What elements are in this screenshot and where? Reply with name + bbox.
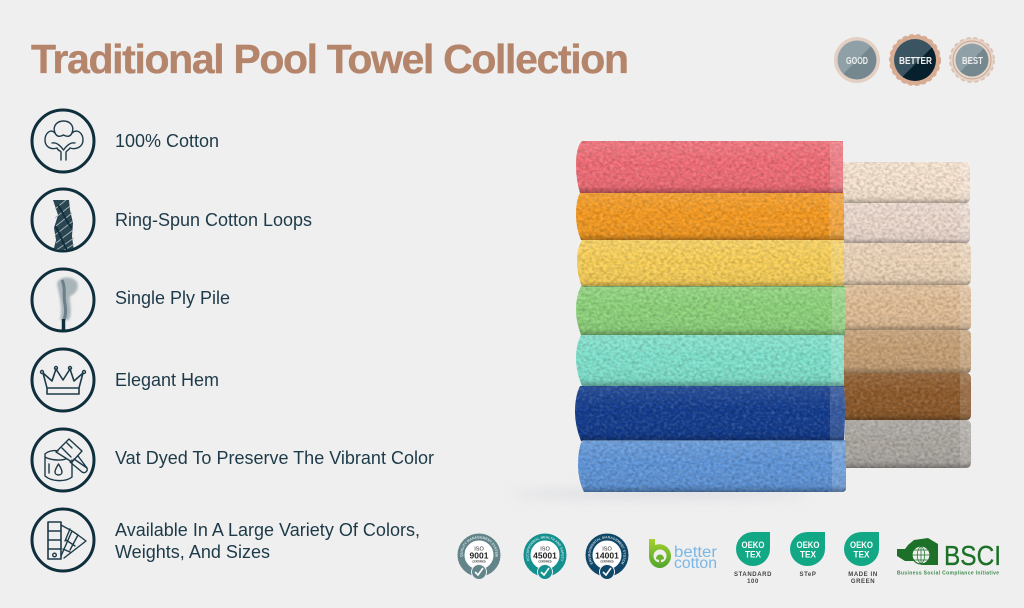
badge: OEKO-TEX Made in Green: GREEN: [851, 579, 875, 585]
badge: ISO 45001: ISO: [540, 546, 550, 552]
badge: best: [950, 38, 994, 82]
badge: ISO 9001: 9001: [470, 550, 489, 560]
label: 100% Cotton: [115, 131, 219, 151]
badge: good: GOOD: [846, 55, 868, 67]
icon: colour fan deck: [32, 509, 94, 571]
badge: ISO 45001: CERTIFIED: [538, 560, 552, 564]
badge: ISO 14001: [586, 534, 628, 579]
badge: OEKO-TEX Made in Green: TEX: [854, 550, 870, 560]
badge: ISO 45001: 45001: [533, 550, 557, 560]
badge: ISO 45001: [524, 534, 566, 579]
badge: ISO 9001: ISO: [474, 546, 484, 552]
badge: OEKO-TEX Standard 100: OEKO: [742, 540, 764, 550]
badge: better: [890, 35, 940, 85]
back towel stack: neutrals: [843, 162, 971, 468]
logo: BSCI: BSCI: [944, 540, 1001, 571]
label: Elegant Hem: [115, 370, 219, 390]
icon: single ply strand: [32, 269, 94, 331]
label: Single Ply Pile: [115, 288, 230, 308]
label: Weights, And Sizes: [115, 542, 270, 562]
certification logos: [458, 532, 1001, 585]
feature: 100% cotton: [32, 110, 219, 172]
badge: best: BEST: [962, 55, 983, 67]
logo: BSCI: [897, 538, 1001, 576]
badge: OEKO-TEX Made in Green: [844, 532, 879, 585]
badge: ISO 9001: CERTIFIED: [472, 560, 486, 564]
badge: ISO 14001: ISO: [602, 546, 612, 552]
badge: OEKO-TEX STeP: STeP: [800, 572, 816, 578]
icon: paint can and brush: [32, 429, 94, 491]
title: Traditional Pool Towel Collection: [31, 36, 629, 82]
icon: twisted yarn: [32, 189, 94, 252]
front towel stack: brights: [575, 141, 846, 492]
badge: OEKO-TEX Standard 100: STANDARD: [734, 572, 772, 578]
floor shadow: [510, 489, 810, 499]
label: Ring-Spun Cotton Loops: [115, 210, 312, 230]
badge: OEKO-TEX Standard 100: TEX: [745, 550, 761, 560]
badge: better: BETTER: [899, 55, 932, 67]
feature list: [32, 110, 434, 571]
logo: better cotton: better: [674, 544, 717, 561]
badge: good: [834, 37, 880, 83]
badge: ISO 14001: 14001: [595, 550, 619, 560]
logo: better cotton: [649, 539, 717, 572]
label: [115, 520, 420, 562]
badge: OEKO-TEX Standard 100: 100: [747, 579, 759, 585]
badge: OEKO-TEX Made in Green: MADE IN: [848, 572, 878, 578]
feature: vat dyed: [32, 429, 434, 491]
icon: cotton boll: [32, 110, 94, 172]
logo: BSCI: Business Social Compliance Initiative: [897, 570, 999, 576]
quality badges: [834, 35, 994, 85]
badge: OEKO-TEX STeP: TEX: [800, 550, 816, 560]
badge: ISO 14001: ENVIRONMENTAL MANAGEMENT SYSTEM: [588, 536, 626, 565]
badge: ISO 45001: OCCUPATIONAL HEALTH AND SAFETY: [526, 536, 564, 562]
icon: crown: [32, 349, 94, 411]
badge: OEKO-TEX Standard 100: [734, 532, 772, 585]
badge: ISO 9001: QUALITY MANAGEMENT SYSTEM: [460, 536, 498, 557]
badge: OEKO-TEX STeP: OEKO: [796, 540, 820, 550]
feature: single ply pile: [32, 269, 230, 331]
badge: ISO 9001: [458, 534, 500, 579]
towel photo: [510, 141, 971, 499]
logo: better cotton: cotton: [674, 555, 717, 572]
feature: variety: [32, 509, 420, 571]
label: Available In A Large Variety Of Colors,: [115, 520, 420, 540]
badge: OEKO-TEX Made in Green: OEKO: [850, 540, 873, 550]
badge: OEKO-TEX STeP: [790, 532, 825, 578]
feature: elegant hem: [32, 349, 219, 411]
label: Vat Dyed To Preserve The Vibrant Color: [115, 448, 434, 468]
feature: ring-spun loops: [32, 189, 312, 252]
badge: ISO 14001: CERTIFIED: [600, 560, 614, 564]
